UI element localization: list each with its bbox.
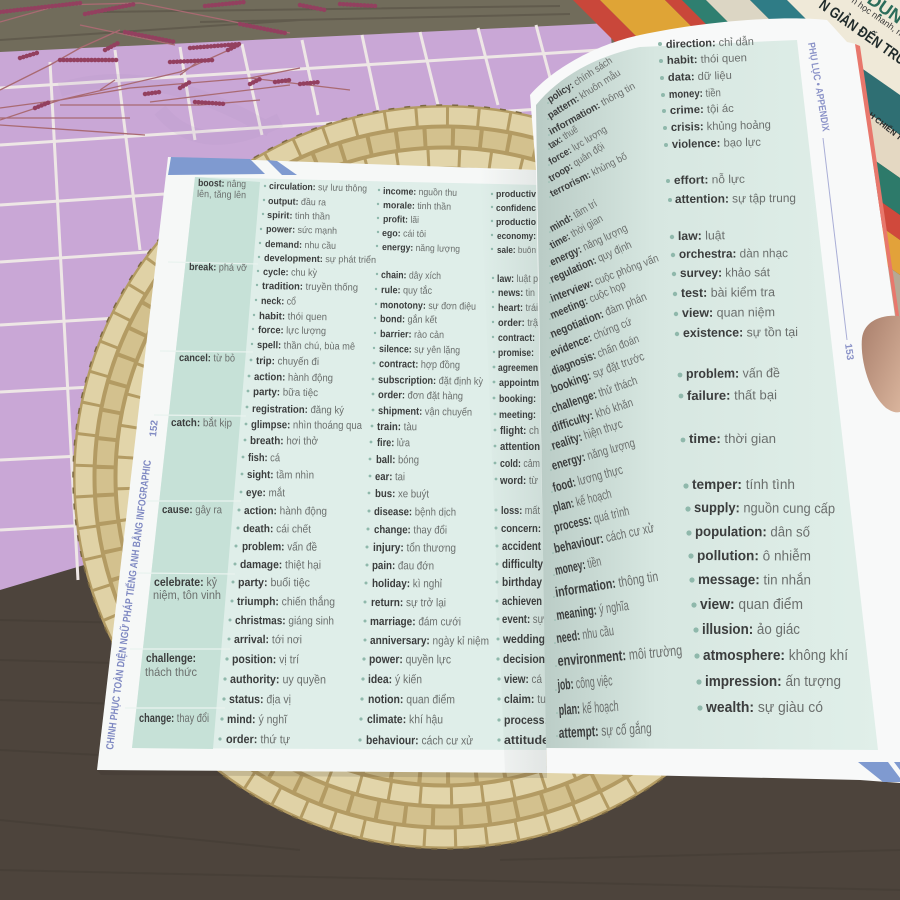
curved collocations column: interview: cuộc phỏng vấn [549,252,660,305]
collocations column 1: registration: đăng ký [252,403,345,417]
collocations column 2: change: thay đổi [374,524,447,537]
collocations column 3 (cut off by the right page): wedding [502,634,545,646]
right collocations column: atmosphere: không khí [703,647,849,664]
collocations column 2: fire: lửa [377,437,411,449]
verb labels column: change: thay đổi [139,711,209,725]
collocations column 1: trip: chuyến đi [256,355,319,368]
collocations column 1 [226,181,376,746]
verb labels column: niệm, tôn vinh [153,590,221,602]
right collocations column: attention: sự tập trung [675,191,796,206]
collocations column 2: anniversary: ngày kỉ niệm [370,635,489,648]
right collocations column: illusion: ảo giác [702,622,800,638]
right collocations column: crisis: khủng hoảng [671,119,771,134]
curved collocations column: pattern: khuôn mẫu [545,66,623,122]
collocations column 3 (cut off by the right page): economy: [497,231,536,242]
collocations column 2: monotony: sự đơn điệu [380,300,476,313]
curved collocations column: environment: môi trường [557,642,683,670]
running header: Phụ lục Appendix: PHỤ LỤC • APPENDIX [805,42,831,133]
collocations column 2: behaviour: cách cư xử [366,733,473,748]
right collocations column: wealth: sự giàu có [705,699,823,716]
collocations column 1: death: cái chết [243,523,311,536]
collocations column 2: power: quyền lực [369,652,451,666]
collocations column 1: force: lực lượng [258,325,326,337]
collocations column 3 (cut off by the right page): contract: [498,333,535,344]
verb labels column: cancel: từ bỏ [179,352,235,364]
collocations column 1: tradition: truyền thống [262,280,358,294]
right collocations column: habit: thói quen [667,52,747,67]
collocations column 1: action: hành động [254,371,333,384]
verb labels column: thách thức [145,665,197,679]
collocations column 1: demand: nhu cầu [265,239,336,252]
collocations column 2: ego: cái tôi [382,228,426,240]
curved collocations column: force: lực lượng [547,124,609,168]
blue corner tabs [858,762,900,782]
collocations column 3 (cut off by the right page): heart: trái [498,303,538,314]
collocations column 1: development: sự phát triển [264,253,376,266]
page number 152: 152 [148,419,161,437]
curved collocations column: need: nhu cầu [555,622,615,646]
curved collocations column: evidence: chứng cứ [549,316,634,360]
collocations column 2: holiday: kì nghỉ [372,578,442,590]
collocations column 2: barrier: rào cản [380,329,444,341]
right collocations column: existence: sự tồn tại [683,325,798,340]
collocations column 1: fish: cá [248,452,281,464]
running title: CHINH PHỤC TOÀN DIỆN NGỮ PHÁP TIẾNG ANH BẰNG INFOGRAPHIC [103,459,154,750]
curved collocations column: diagnosis: chấn đoán [550,333,641,378]
collocations column 3 (cut off by the right page): birthday [502,577,543,589]
collocations column 3 (cut off by the right page): loss: mất [501,505,540,517]
curved collocations column: money: tiền [554,553,603,578]
collocations column 3 (cut off by the right page): meeting: [499,409,536,421]
verb labels column: catch: bắt kịp [171,416,232,430]
collocations column 3 (cut off by the right page): productio [496,217,536,228]
collocations column 3 (cut off by the right page): productiv [496,189,537,200]
right page bullets [547,42,703,737]
collocations column 2: return: sự trở lại [371,597,446,609]
collocations column 3 (cut off by the right page): sale: buôn [497,245,536,256]
collocations column 3 (cut off by the right page): decision [503,652,545,666]
curved collocations column: mind: tâm trí [548,198,599,235]
collocations column 1: status: địa vị [229,692,291,706]
collocations column 2: bond: gắn kết [380,312,437,326]
curved collocations column: negotiation: đàm phán [549,291,649,341]
collocations column 2: order: đơn đặt hàng [378,389,463,402]
right collocations column: survey: khảo sát [680,265,771,280]
collocations column 1: triumph: chiến thắng [237,595,335,609]
collocations column 3 (cut off by the right page): booking: [499,393,536,405]
collocations column 1: circulation: sự lưu thông [269,181,367,195]
gutter shadow [480,170,547,773]
right collocations column: pollution: ô nhiễm [697,547,811,564]
collocations column 1: breath: hơi thở [250,435,318,448]
curved collocations column: information: thông tin [547,81,637,138]
curved collocations column: meaning: ý nghĩa [555,597,630,623]
right collocations column: effort: nỗ lực [674,173,745,187]
curved collocations column: tax: thuế [546,123,581,152]
collocations column 2: energy: năng lượng [382,242,460,255]
collocations column 2: ear: tai [375,471,405,483]
collocations column 2: profit: lãi [383,214,419,226]
curved collocations column: process: quá trình [552,503,631,535]
right collocations column: crime: tội ác [670,103,735,117]
right collocations column: direction: chỉ dẫn [666,35,754,51]
curved collocations column: energy: năng lượng [548,222,629,269]
coral book edge [855,44,900,332]
collocations column 1: neck: cổ [261,295,297,308]
collocations column 1: cycle: chu kỳ [263,267,317,279]
curved collocations column: food: lương thực [551,462,625,495]
verb labels column: celebrate: kỷ [154,577,217,589]
curved collocations column: information: thông tin [554,568,659,600]
right collocations column: view: quan niệm [682,305,775,320]
right collocations column: temper: tính tình [692,477,795,492]
right collocations column: impression: ấn tượng [705,673,841,690]
collocations column 3 (cut off by the right page): process: [504,713,548,727]
collocations column 1: damage: thiệt hại [240,559,321,572]
right collocations column: population: dân số [695,523,810,540]
right collocations column: problem: vấn đề [686,365,780,381]
right collocations column: test: bài kiểm tra [681,285,775,300]
verb labels column [139,178,248,725]
verb labels column: boost: nâng [198,178,246,190]
right collocations column: supply: nguồn cung cấp [694,499,835,516]
curved collocations column: energy: năng lượng [550,436,637,473]
collocations column 2: chain: dây xích [381,270,441,282]
curved collocations column: difficulty: khó khăn [550,395,635,435]
thumb holding the page [862,316,900,412]
blue corner tabs [168,157,297,175]
collocations column 1: output: đầu ra [268,196,327,209]
right collocations column: failure: thất bại [687,387,777,403]
curved collocations column: attempt: sự cố gắng [558,720,652,742]
collocations column 3 (cut off by the right page): event: sự [502,614,544,626]
mint table background [132,177,547,750]
collocations column 2: shipment: vận chuyển [378,405,472,419]
curved collocations column: regulation: quy định [548,239,634,286]
collocations column 1: mind: ý nghĩ [227,712,288,726]
collocations column 3 (cut off by the right page): appointm [499,377,539,389]
collocations column 1: arrival: tới nơi [234,634,302,646]
collocations column 2: morale: tinh thần [383,200,451,213]
collocations column 3 (cut off by the right page): confidenc [496,203,536,214]
collocations column 1: glimpse: nhìn thoáng qua [251,419,363,432]
verb column background [125,177,260,749]
right collocations column: orchestra: dàn nhạc [679,246,788,261]
verb labels column: challenge: [146,651,196,665]
curved collocations column: job: công việc [556,672,613,694]
collocations column 1: spell: thần chú, bùa mê [257,339,356,353]
collocations column 1: authority: uy quyền [230,672,326,687]
verb labels column: break: phá vỡ [189,262,248,274]
collocations column 1: spirit: tinh thần [267,210,330,223]
verb labels column: cause: gây ra [162,504,223,516]
collocations column 2: disease: bệnh dịch [374,506,456,519]
collocations column 2: income: nguồn thu [383,186,457,199]
collocations column 1: power: sức mạnh [266,224,337,237]
curved collocations column [545,55,683,742]
dried flower branches [0,2,375,135]
curved collocations column: policy: chính sách [546,55,615,106]
collocations column 2: idea: ý kiến [368,672,422,686]
right collocations column: law: luật [678,228,726,243]
collocations column 3 (cut off by the right page): achieven [502,596,542,608]
collocations column 1: party: buổi tiệc [238,577,310,589]
collocations column 2: climate: khí hậu [367,712,443,726]
collocations column 3 (cut off by the right page): order: trậ [498,318,538,329]
collocations column 1: action: hành động [244,505,327,518]
left page (152) [97,157,549,778]
collocations column 2: silence: sự yên lặng [379,344,460,356]
woven straw mat [73,105,817,849]
right collocations column: data: dữ liệu [668,70,732,84]
collocations column 1: habit: thói quen [259,311,327,323]
collocations column 2: pain: đau đớn [372,560,434,573]
collocations column 2 [366,186,489,748]
curved collocations column: troop: quân đội [547,141,607,185]
stack of books, top right [573,0,900,340]
collocations column 3 (cut off by the right page): agreemen [498,362,538,374]
collocations column 3 (cut off by the right page): promise: [498,348,534,359]
collocations column 2: contract: hợp đồng [379,358,460,371]
curved collocations column: reality: hiện thực [550,417,624,453]
right collocations column: time: thời gian [689,431,776,446]
right collocations column: violence: bạo lực [672,137,761,151]
curved collocations column: plan: kế hoạch [551,486,613,515]
collocations column 1: christmas: giáng sinh [235,615,334,628]
collocations column 2: injury: tổn thương [373,542,456,555]
collocations column 2: train: tàu [377,421,417,433]
right page (153) [530,18,900,783]
right collocations column: message: tin nhắn [698,571,811,588]
collocations column 2: notion: quan điểm [368,692,455,706]
collocations column 3 (cut off by the right page): attitude [504,733,549,747]
lilac tiled board [0,23,640,590]
collocations column 3 (cut off by the right page): word: từ [499,475,539,487]
right collocations column: view: quan điểm [700,597,803,613]
curved collocations column: meeting: cuộc họp [548,279,628,322]
collocations column 2: subscription: đặt định kỳ [378,374,484,388]
collocations column 2: ball: bóng [376,454,419,466]
mint table background [536,40,878,750]
collocations column 1: eye: mắt [246,486,285,499]
curved collocations column: terrorism: khủng bố [548,150,629,200]
right collocations column [666,35,849,716]
curved collocations column: time: thời gian [548,212,605,252]
right collocations column: money: tiền [669,87,721,101]
collocations column 1: sight: tầm nhìn [247,469,314,482]
curved collocations column: booking: sự đặt trước [549,349,646,396]
collocations column 1: party: bữa tiệc [253,386,318,399]
collocations column 3 (cut off by the right page): law: luật p [497,274,538,285]
collocations column 3 (cut off by the right page): difficulty [502,559,544,571]
curved collocations column: plan: kế hoạch [558,698,619,719]
collocations column 2: marriage: đám cưới [370,616,461,628]
verb labels column: lên, tăng lên [197,189,246,201]
collocations column 3 (cut off by the right page): view: cá [504,672,542,686]
collocations column 3 (cut off by the right page): accident [502,541,541,553]
page number 153: 153 [842,343,855,361]
collocations column 2: rule: quy tắc [381,283,432,297]
collocations column 3 (cut off by the right page) [496,189,549,747]
collocations column 3 (cut off by the right page): claim: tu [504,692,546,706]
collocations column 3 (cut off by the right page): concern: [501,523,541,535]
collocations column 1: order: thứ tự [226,732,290,746]
collocations column 1: problem: vấn đề [242,541,317,554]
collocations column 2: bus: xe buýt [375,488,429,500]
collocations column 3 (cut off by the right page): cold: cảm [500,458,540,470]
collocations column 3 (cut off by the right page): news: tin [498,288,535,299]
curved collocations column: challenge: thử thách [549,373,639,416]
left page bullets [218,185,501,742]
collocations column 1: position: vị trí [232,652,300,666]
curved collocations column: behaviour: cách cư xử [553,520,655,556]
collocations column 3 (cut off by the right page): attention [500,441,540,453]
collocations column 3 (cut off by the right page): flight: ch [500,425,539,437]
